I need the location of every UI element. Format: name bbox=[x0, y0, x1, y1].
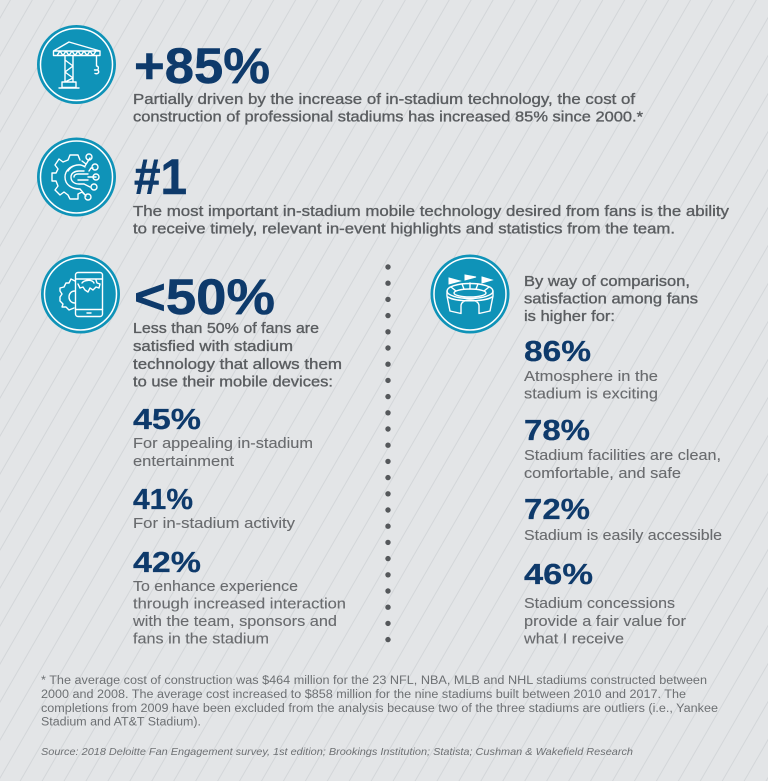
icon: gear circuit bbox=[37, 138, 116, 216]
stat: 78%: 78% bbox=[524, 415, 590, 447]
icon: stadium bbox=[430, 254, 510, 334]
stat: 46%: what I receive bbox=[523, 630, 624, 648]
text: most desired technology description: to receive timely, relevant in-event highlights and statistics from the team. bbox=[133, 220, 675, 238]
text: construction cost description: construction of professional stadiums has increased 85% since 2000.* bbox=[133, 108, 643, 126]
stat: 86%: 86% bbox=[524, 336, 591, 368]
source line: Source: 2018 Deloitte Fan Engagement survey, 1st edition; Brookings Institution; Statista; Cushman & Wakefield Research bbox=[41, 746, 633, 758]
text: less than 50% description: Less than 50% of fans are bbox=[133, 320, 319, 337]
section: satisfaction comparison bbox=[430, 254, 722, 648]
heading: +85%: +85% bbox=[134, 38, 270, 94]
heading: <50%: <50% bbox=[134, 269, 275, 325]
stat: 41% bbox=[133, 484, 296, 532]
stat: 78%: Stadium facilities are clean, bbox=[524, 447, 721, 464]
stat: 72%: Stadium is easily accessible bbox=[524, 527, 722, 544]
stat: 72%: 72% bbox=[524, 494, 590, 526]
dotted divider bbox=[385, 264, 391, 642]
text: less than 50% description: technology that allows them bbox=[133, 356, 342, 373]
text: most desired technology description bbox=[133, 203, 730, 238]
stat: 46%: provide a fair value for bbox=[524, 613, 686, 630]
stat: 45%: For appealing in-stadium bbox=[133, 435, 313, 452]
stat: 42%: with the team, sponsors and bbox=[132, 613, 337, 630]
stat: 78% bbox=[524, 415, 721, 482]
heading: #1: #1 bbox=[134, 149, 187, 205]
text: less than 50% description: to use their mobile devices: bbox=[133, 374, 333, 390]
stat: 86% bbox=[524, 336, 658, 402]
stat: 42%: To enhance experience bbox=[133, 578, 298, 595]
stat: 46%: 46% bbox=[524, 559, 593, 591]
stat: 41%: 41% bbox=[133, 484, 193, 516]
stat: 46% bbox=[523, 559, 686, 648]
text: comparison intro: satisfaction among fans bbox=[524, 290, 698, 308]
stat: 45%: entertainment bbox=[133, 453, 235, 470]
section: construction cost bbox=[37, 25, 643, 126]
footnote bbox=[41, 675, 718, 728]
text: most desired technology description: The most important in-stadium mobile technology desired from fans is the ability bbox=[133, 203, 730, 220]
stat: 86%: stadium is exciting bbox=[524, 386, 658, 402]
stat: 78%: comfortable, and safe bbox=[524, 465, 681, 482]
stat: 42%: 42% bbox=[133, 547, 201, 579]
footnote: 2000 and 2008. The average cost increased to $858 million for the nine stadiums built between 2010 and 2017. The bbox=[41, 689, 686, 701]
stat: 45% bbox=[133, 404, 313, 470]
footnote: Stadium and AT&T Stadium). bbox=[41, 716, 201, 728]
stat: 42%: fans in the stadium bbox=[133, 630, 269, 648]
section: most desired technology bbox=[37, 138, 730, 238]
section: fan satisfaction with mobile technology bbox=[41, 254, 346, 648]
text: comparison intro: is higher for: bbox=[524, 308, 615, 325]
text: construction cost description bbox=[133, 91, 643, 126]
stat: 45%: 45% bbox=[133, 404, 201, 436]
text: less than 50% description bbox=[133, 320, 342, 390]
footnote: * The average cost of construction was $464 million for the 23 NFL, NBA, MLB and NHL stadiums constructed between bbox=[41, 675, 707, 687]
stat: 41%: For in-stadium activity bbox=[133, 515, 296, 532]
stat: 42% bbox=[132, 547, 346, 648]
stat: 72% bbox=[524, 494, 722, 544]
text: less than 50% description: satisfied with stadium bbox=[133, 338, 293, 355]
stat: 86%: Atmosphere in the bbox=[524, 368, 658, 385]
text: construction cost description: Partially driven by the increase of in-stadium technology, the cost of bbox=[133, 91, 636, 108]
stat: 42%: through increased interaction bbox=[133, 596, 346, 612]
footnote: completions from 2009 have been excluded from the analysis because two of the three stadiums are outliers (i.e., Yankee bbox=[41, 703, 718, 715]
text: comparison intro: By way of comparison, bbox=[524, 273, 690, 290]
icon: phone with gears bbox=[41, 254, 120, 334]
icon: crane bbox=[37, 25, 116, 104]
text: comparison intro bbox=[524, 273, 698, 325]
stat: 46%: Stadium concessions bbox=[524, 595, 675, 612]
